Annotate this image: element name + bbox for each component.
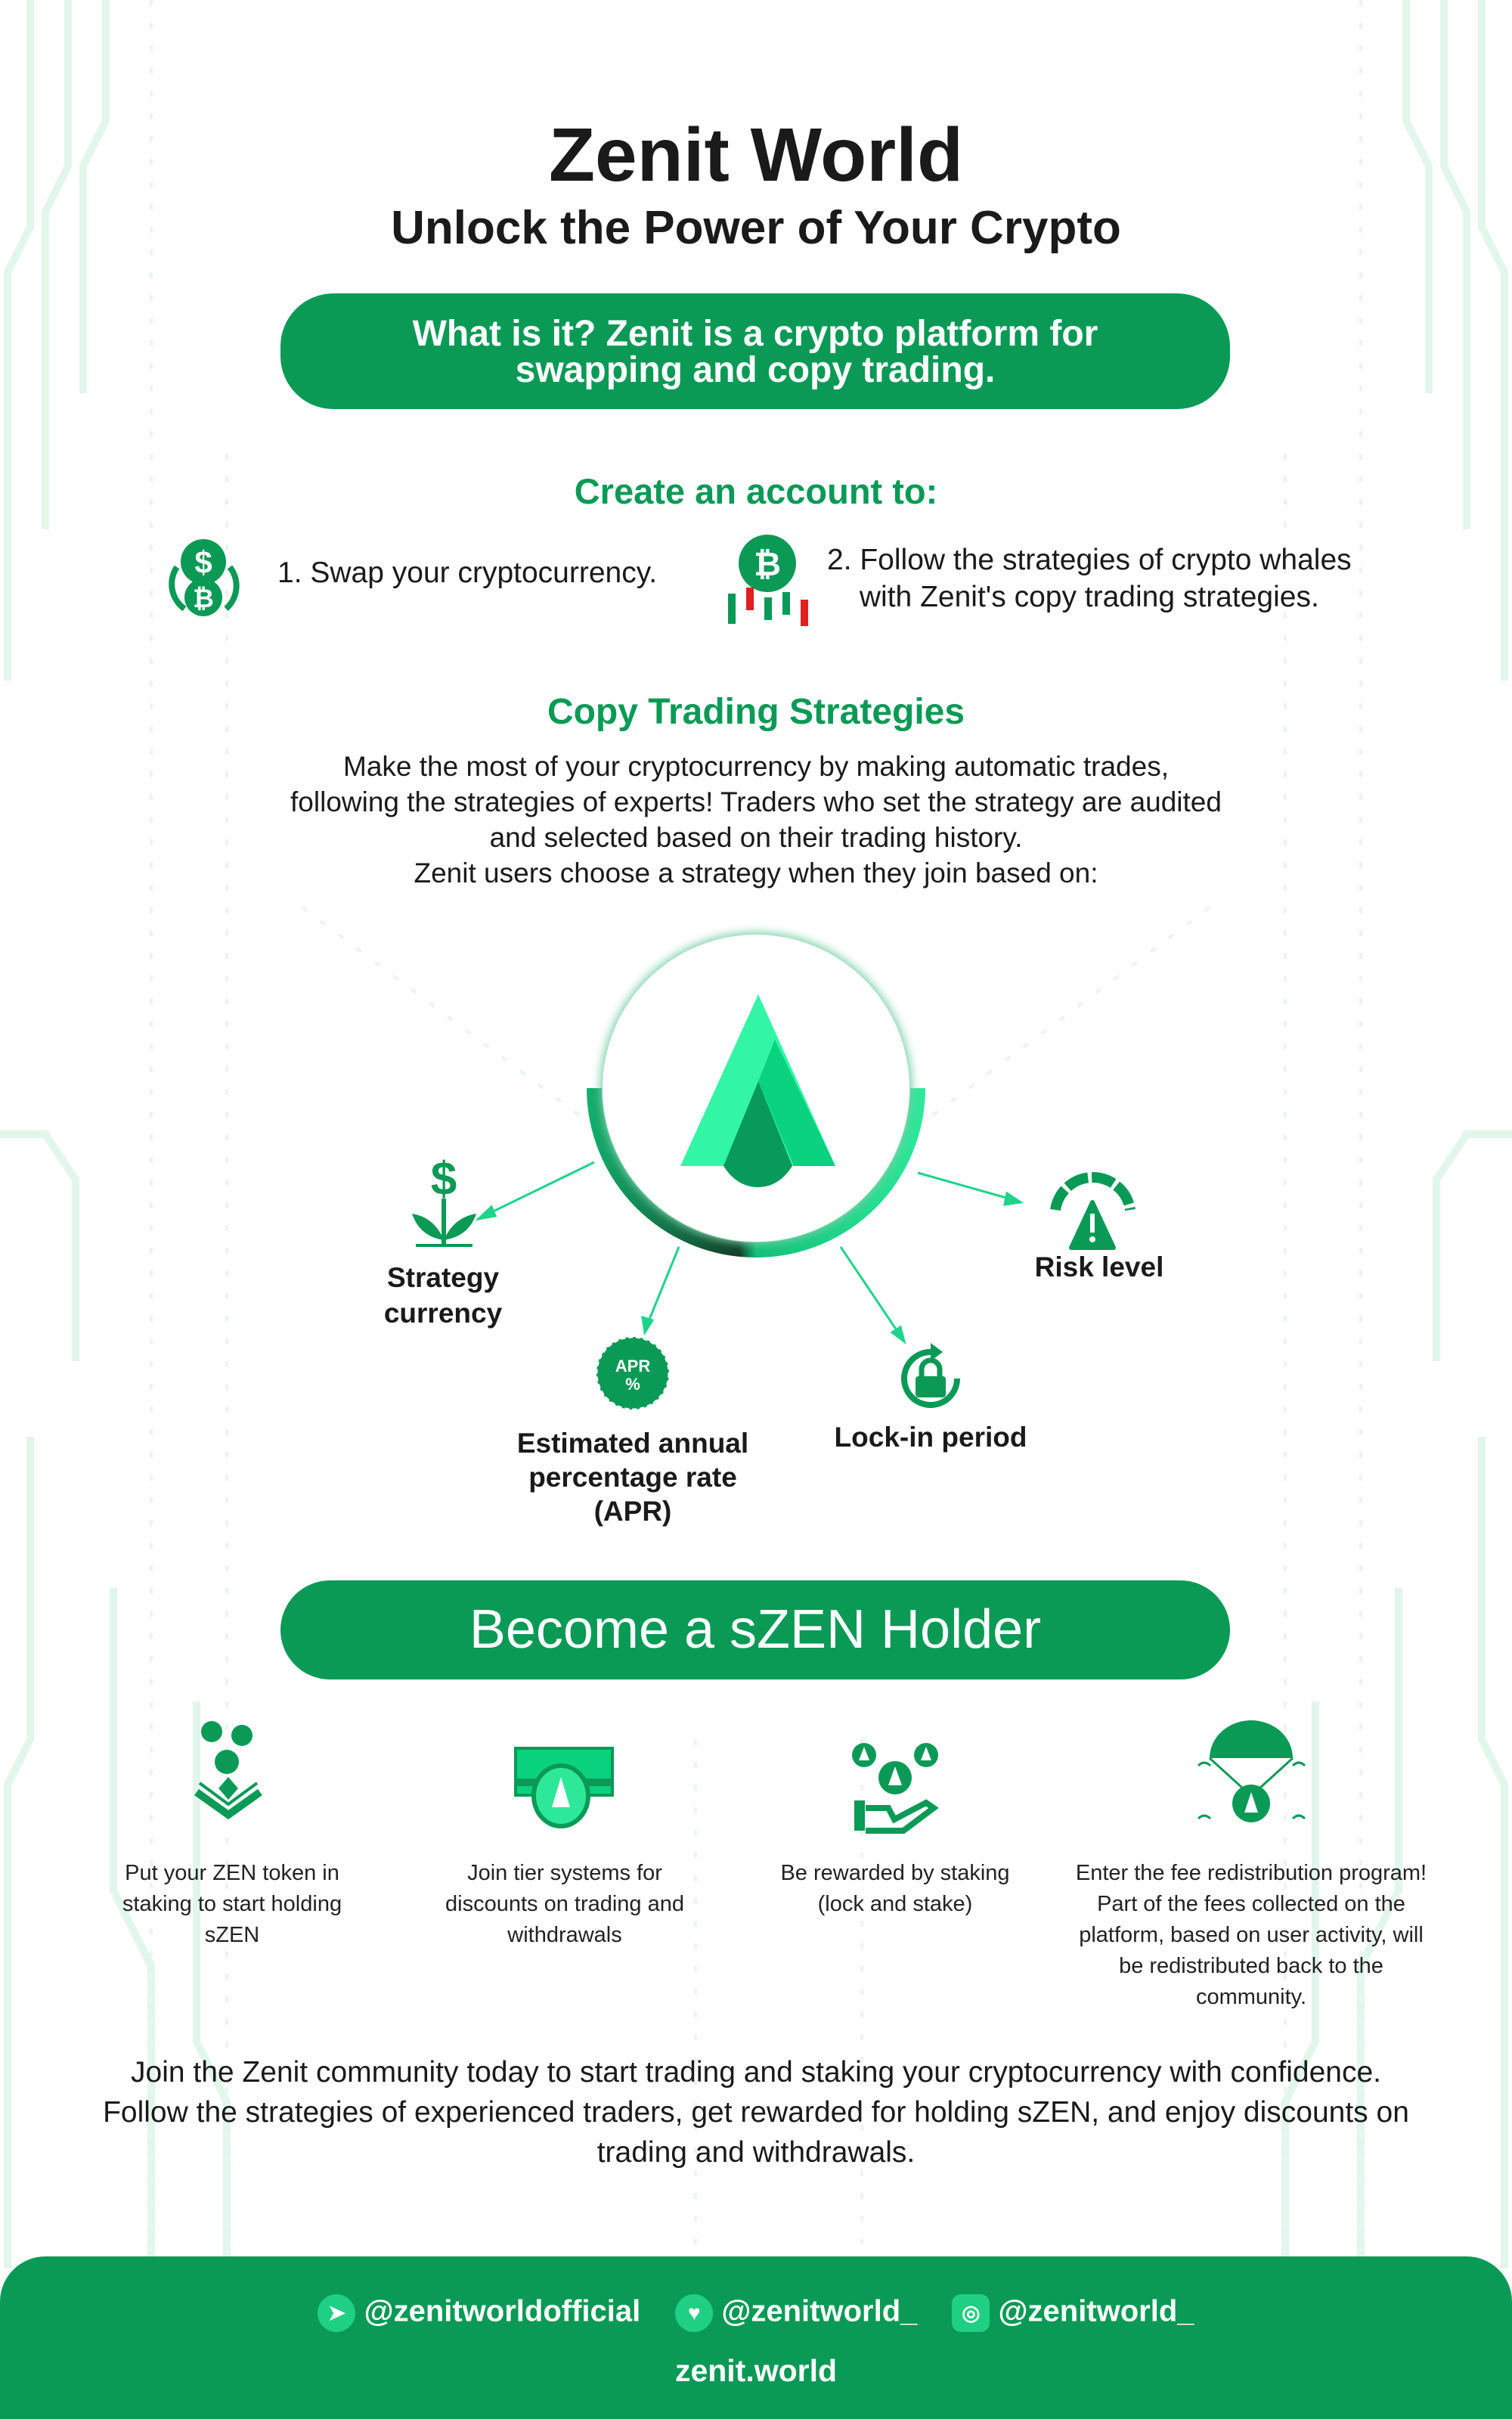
- paragraph: copy trading: following the strategies of experts! Traders who set the strategy are audited: [290, 786, 1222, 817]
- text: strategy currency: [384, 1262, 502, 1329]
- text: item 2: with Zenit's copy trading strategies.: [860, 581, 1319, 613]
- paragraph: copy trading: and selected based on their trading history.: [490, 822, 1022, 853]
- closing paragraph: [103, 2056, 1409, 2169]
- social links: ♥: [688, 2301, 701, 2324]
- icon: reward hand: [852, 1743, 939, 1834]
- text: reward: Be rewarded by staking (lock and stake): [780, 1861, 1010, 1916]
- icon: bitcoin chart: [728, 535, 808, 626]
- pill: become a sZEN holder: Become a sZEN Holder: [469, 1599, 1041, 1660]
- title: Zenit World: [549, 113, 963, 197]
- icon: swap coins: ₿: [193, 585, 214, 613]
- subtitle: Unlock the Power of Your Crypto: [391, 202, 1121, 254]
- icon: risk level: [1050, 1172, 1136, 1250]
- arrows: [475, 1161, 1024, 1344]
- pill: what is it: What is it? Zenit is a crypto platform for: [413, 314, 1098, 354]
- icon: lock-in period: [901, 1343, 960, 1408]
- text: risk level: Risk level: [1035, 1251, 1163, 1282]
- social links: @zenitworld_: [998, 2295, 1194, 2328]
- heading: create an account: Create an account to:: [575, 471, 937, 511]
- icon: strategy currency: $: [431, 1153, 457, 1205]
- text: APR: (APR): [594, 1496, 671, 1527]
- text: APR: [517, 1428, 748, 1527]
- social links: ➤: [328, 2301, 345, 2324]
- pill: what is it: swapping and copy trading.: [516, 350, 995, 390]
- text: item 1: 1. Swap your cryptocurrency.: [277, 557, 657, 589]
- text: strategy currency: currency: [384, 1298, 502, 1329]
- text: strategy currency: Strategy: [387, 1262, 499, 1293]
- closing paragraph: Follow the strategies of experienced traders, get rewarded for holding sZEN, and enjoy discounts on: [103, 2096, 1409, 2129]
- paragraph: copy trading: [290, 751, 1222, 889]
- text: APR: percentage rate: [528, 1462, 737, 1493]
- closing paragraph: trading and withdrawals.: [597, 2136, 915, 2169]
- text: tier: Join tier systems for discounts on trading and withdrawals: [445, 1861, 684, 1947]
- text: item 2: [827, 544, 1352, 613]
- icon: tier card: [514, 1747, 614, 1828]
- paragraph: copy trading: Make the most of your cryptocurrency by making automatic trades,: [343, 751, 1169, 782]
- heading: copy trading strategies: Copy Trading Strategies: [547, 692, 965, 732]
- icon: staking stack: [194, 1721, 262, 1819]
- footer: [0, 2256, 1512, 2419]
- pill: what is it: [280, 293, 1230, 409]
- text: APR: Estimated annual: [517, 1428, 748, 1459]
- diagram: central logo with arc: [587, 926, 925, 1258]
- icon: bitcoin chart: ₿: [754, 546, 781, 583]
- icon: APR: APR: [615, 1357, 650, 1375]
- social links: @zenitworld_: [721, 2295, 917, 2328]
- icon: APR: %: [625, 1375, 640, 1394]
- icon: APR: [596, 1337, 669, 1410]
- text: item 2: 2. Follow the strategies of crypto whales: [827, 544, 1352, 576]
- icon: swap coins: [169, 539, 240, 616]
- text: staking: Put your ZEN token in staking to start holding sZEN: [122, 1861, 342, 1947]
- icon: strategy currency: [412, 1153, 476, 1247]
- text: fee redistribution: Enter the fee redistribution program! Part of the fees collected on the platform, based on user activity, will be redistributed back to the community.: [1076, 1861, 1427, 2009]
- social links: ◎: [962, 2301, 981, 2324]
- pill: become a sZEN holder: [280, 1580, 1230, 1679]
- social links: @zenitworldofficial: [364, 2295, 640, 2328]
- text: lock-in period: Lock-in period: [835, 1422, 1027, 1453]
- paragraph: copy trading: Zenit users choose a strategy when they join based on:: [414, 858, 1098, 889]
- icon: parachute: [1198, 1720, 1306, 1822]
- website: zenit.world: [675, 2353, 837, 2388]
- closing paragraph: Join the Zenit community today to start trading and staking your cryptocurrency with confidence.: [131, 2056, 1381, 2089]
- social links: [318, 2294, 1194, 2332]
- icon: swap coins: $: [194, 544, 212, 580]
